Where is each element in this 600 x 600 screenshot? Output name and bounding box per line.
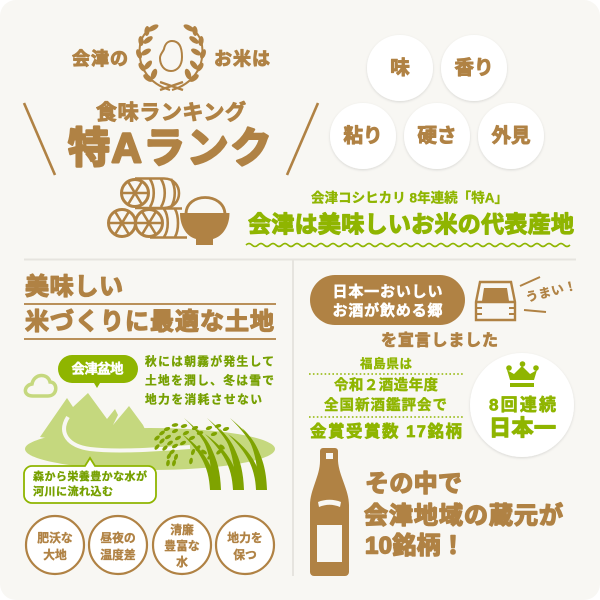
icon: wreath with rice grain xyxy=(135,23,207,90)
slash marks xyxy=(24,103,318,175)
text: award summary: 令和２酒造年度 xyxy=(334,376,438,394)
text: award summary: 全国新酒鑑評会で xyxy=(324,396,447,414)
text: award summary: 金賞受賞数 17銘柄 xyxy=(310,421,462,441)
panel: four feature circles: 水 xyxy=(176,555,188,569)
panel: four feature circles: 温度差 xyxy=(100,548,136,562)
heading: 美味しい米づくりに最適な土地: 美味しい xyxy=(25,274,123,300)
text: その中で会津地域の蔵元が10銘柄！: 10銘柄！ xyxy=(365,532,465,560)
badge: 8回連続日本一 xyxy=(470,353,574,457)
heading: 特Aランク: 特Aランク xyxy=(68,124,272,172)
text: award summary xyxy=(309,356,464,441)
callout: water: 河川に流れ込む xyxy=(33,484,113,498)
badge: 8回連続日本一: 8回連続 xyxy=(489,396,556,414)
panel: five evaluation circles: 硬さ xyxy=(417,125,457,147)
icon: sake bottle xyxy=(310,448,349,576)
text: climate description: 地力を消耗させない xyxy=(145,392,262,406)
heading: 特Aランク: 食味ランキング xyxy=(96,100,246,124)
callout: water xyxy=(24,458,156,503)
pill: 日本一おいしいお酒が飲める郷 xyxy=(310,275,465,325)
callout: water: 森から栄養豊かな水が xyxy=(33,469,147,483)
illustration: rice plants xyxy=(153,418,267,490)
icon: sake masu xyxy=(476,282,515,320)
pill: 日本一おいしいお酒が飲める郷: 日本一おいしい xyxy=(332,284,442,300)
text: を宣言しました: を宣言しました xyxy=(381,332,498,350)
section dividers xyxy=(24,260,576,576)
heading: 会津のお米は: お米は xyxy=(214,49,270,69)
illustration: Aizu basin xyxy=(25,393,275,470)
panel: four feature circles: 地力を xyxy=(227,531,263,545)
heading: 会津は美味しいお米の代表産地: 会津は美味しいお米の代表産地 xyxy=(248,211,574,237)
heading: 会津のお米は xyxy=(72,49,270,69)
wavy underline xyxy=(246,244,570,246)
heading: 美味しい米づくりに最適な土地: 米づくりに最適な土地 xyxy=(25,308,274,336)
panel: four feature circles xyxy=(26,516,274,574)
text: climate description: 秋には朝霧が発生して xyxy=(145,354,274,368)
panel: four feature circles: 清廉 xyxy=(170,523,194,537)
panel: five evaluation circles: 香り xyxy=(454,57,494,79)
icon: cloud xyxy=(25,375,56,396)
panel: four feature circles: 豊富な xyxy=(164,539,200,553)
icon: rice bowl xyxy=(180,198,230,245)
icon: crown xyxy=(506,361,539,387)
text: award summary: 福島県は xyxy=(360,356,412,371)
label: 会津盆地: 会津盆地 xyxy=(72,360,124,376)
text: うまい！: うまい！ xyxy=(524,279,578,305)
panel: four feature circles: 大地 xyxy=(43,548,67,562)
text: その中で会津地域の蔵元が10銘柄！: その中で xyxy=(365,470,462,498)
heading: 特Aランク xyxy=(68,100,272,172)
panel: five evaluation circles: 外見 xyxy=(491,125,531,147)
text: climate description: 土地を潤し、冬は雪で xyxy=(145,374,274,388)
icon: rice bales xyxy=(108,178,187,238)
text: その中で会津地域の蔵元が10銘柄！: 会津地域の蔵元が xyxy=(364,502,563,530)
text: 会津コシヒカリ 8年連続: 会津コシヒカリ 8年連続「特A」 xyxy=(311,190,508,206)
heading: 会津のお米は: 会津の xyxy=(72,49,128,69)
panel: four feature circles: 保つ xyxy=(233,548,257,562)
badge: 8回連続日本一: 日本一 xyxy=(489,416,556,440)
pill: 日本一おいしいお酒が飲める郷: お酒が飲める郷 xyxy=(332,302,442,320)
text: climate description xyxy=(145,354,274,406)
panel: four feature circles: 肥沃な xyxy=(37,531,73,545)
panel: four feature circles: 昼夜の xyxy=(100,531,136,545)
text: うまい！ xyxy=(520,277,578,312)
label: 会津盆地 xyxy=(58,355,138,388)
panel: five evaluation circles xyxy=(330,35,544,169)
text: その中で会津地域の蔵元が10銘柄！ xyxy=(364,470,563,560)
panel: five evaluation circles: 味 xyxy=(390,57,410,79)
panel: five evaluation circles: 粘り xyxy=(343,125,383,147)
heading: 美味しい米づくりに最適な土地 xyxy=(24,274,276,339)
